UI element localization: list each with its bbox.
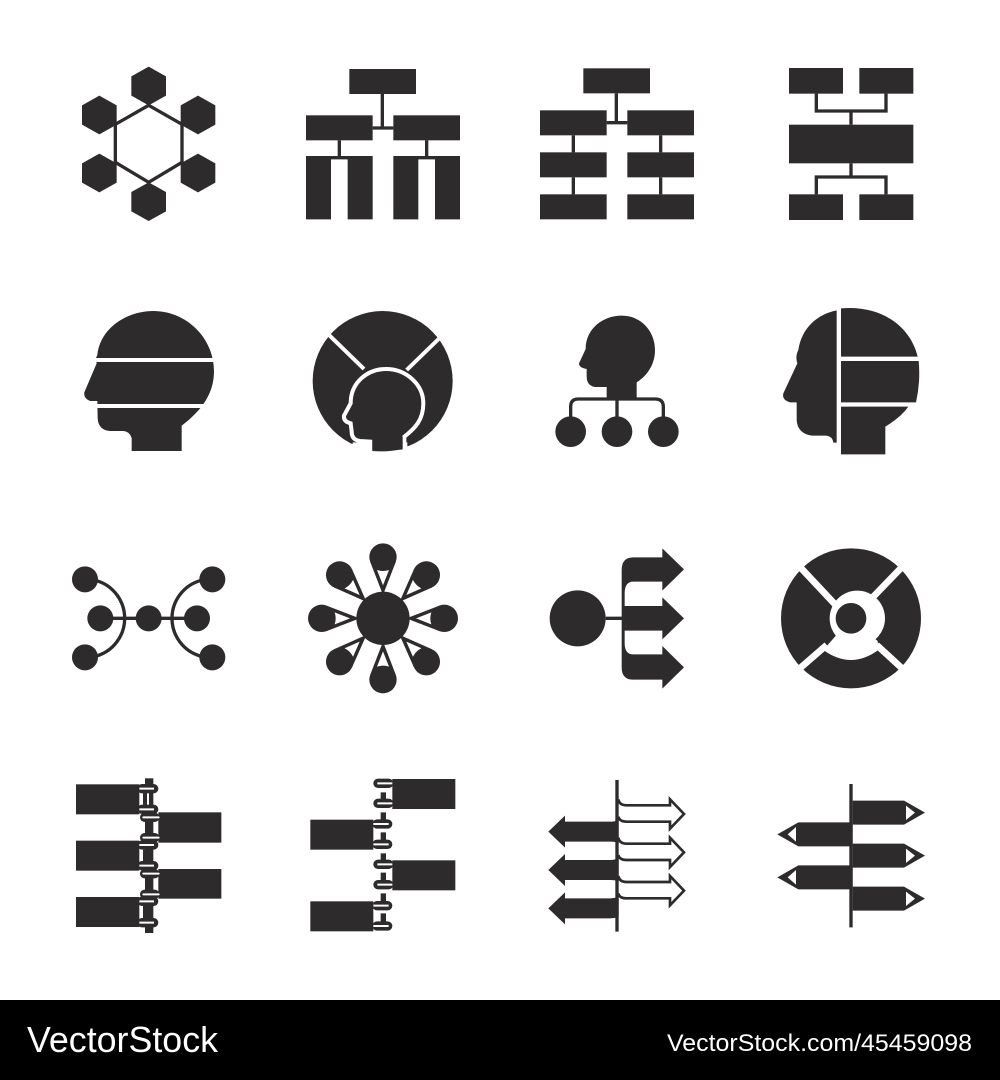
icon: head inside segmented circle (313, 311, 453, 457)
icon: central block hierarchy (789, 68, 913, 220)
right bar two (140, 869, 221, 899)
icon: org chart with stacked boxes (540, 68, 694, 219)
left bar three (76, 897, 158, 927)
icon: bars on interlocking chain (76, 778, 221, 933)
icon: org chart with columns (306, 69, 460, 219)
icon: head with horizontal bands (84, 311, 218, 451)
icon: hexagon network (82, 67, 215, 221)
icon: head split into sections (783, 308, 919, 454)
left bar one (76, 784, 158, 814)
icon: hub with eight teardrop petals (308, 543, 458, 693)
right bar one (140, 812, 221, 843)
footer logo text: VectorStock (27, 1019, 219, 1060)
footer band (0, 1000, 1000, 1080)
icon: circle branching into three arrows (550, 548, 684, 689)
footer image id: VectorStock.com/45459098 (667, 1030, 972, 1057)
left bar two (76, 840, 158, 871)
icon: solid and outline arrows from spine (548, 780, 684, 932)
icon: mirrored node tree (72, 566, 225, 670)
icon: person with three child nodes (555, 316, 679, 447)
icon: alternating bars on broken chain (310, 779, 455, 931)
icon: pencil shaped bars on spine (777, 784, 925, 927)
icon: segmented ring with centre dot (781, 548, 921, 688)
